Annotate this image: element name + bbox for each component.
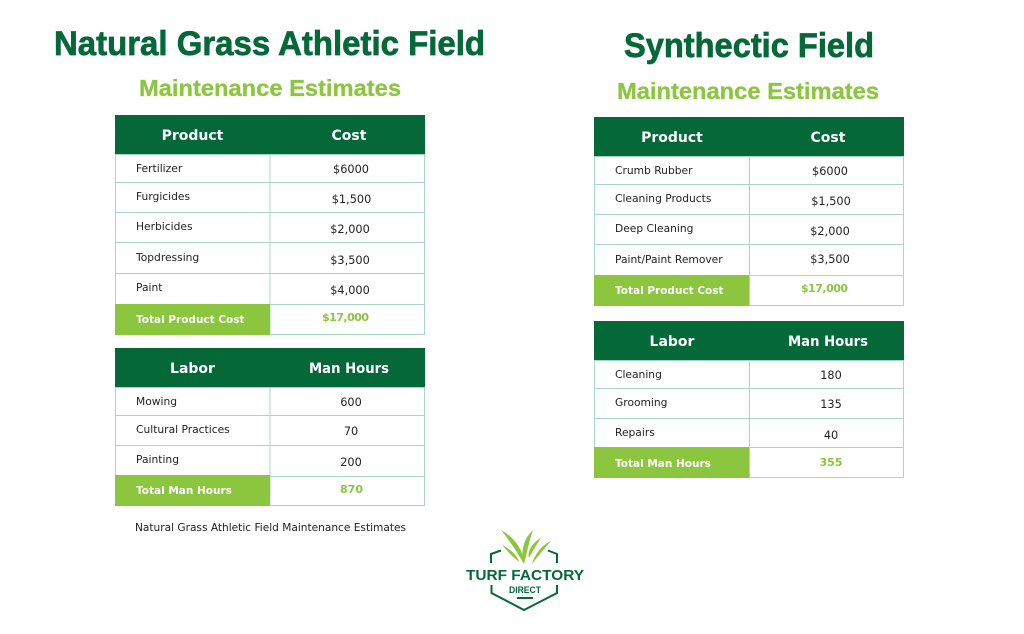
panel: natural grass product cost table: $17,000 bbox=[322, 311, 369, 324]
panel: synthetic product cost table: Cleaning Products bbox=[615, 192, 712, 205]
panel: natural grass labor table: Man Hours bbox=[309, 361, 389, 377]
subtitle: natural grass maintenance estimates: Maintenance Estimates bbox=[139, 75, 401, 101]
panel: natural grass product cost table bbox=[115, 115, 425, 335]
panel: synthetic labor table: Total Man Hours bbox=[615, 458, 711, 470]
logo: Turf Factory Direct bbox=[466, 530, 584, 610]
panel: synthetic product cost table: $6000 bbox=[812, 165, 848, 178]
panel: natural grass labor table: 70 bbox=[344, 425, 358, 438]
panel: synthetic product cost table: Cost bbox=[811, 130, 846, 146]
panel: natural grass product cost table: Herbicides bbox=[136, 220, 193, 233]
panel: natural grass product cost table: $1,500 bbox=[332, 193, 371, 206]
panel: synthetic product cost table: Total Product Cost bbox=[615, 285, 724, 297]
panel: synthetic labor table: Repairs bbox=[615, 426, 655, 439]
panel: natural grass labor table bbox=[115, 348, 425, 506]
panel: natural grass labor table: 870 bbox=[340, 483, 363, 496]
panel: natural grass labor table: 600 bbox=[340, 396, 362, 409]
panel: natural grass product cost table: $2,000 bbox=[330, 223, 370, 236]
panel: natural grass product cost table: Total Product Cost bbox=[136, 314, 245, 326]
panel: synthetic labor table: 135 bbox=[820, 398, 842, 411]
panel: synthetic product cost table: $1,500 bbox=[811, 195, 851, 208]
panel: natural grass product cost table: Furgicides bbox=[136, 190, 190, 203]
panel: synthetic labor table: Grooming bbox=[615, 396, 667, 409]
panel: natural grass labor table: Painting bbox=[136, 453, 179, 466]
panel: synthetic labor table: Cleaning bbox=[615, 368, 662, 381]
logo wordmark: TURF FACTORY bbox=[466, 567, 584, 584]
panel: natural grass labor table: Mowing bbox=[136, 395, 177, 408]
subtitle: synthetic maintenance estimates: Maintenance Estimates bbox=[617, 78, 879, 104]
panel: synthetic product cost table: $3,500 bbox=[810, 253, 850, 266]
panel: natural grass product cost table: $3,500 bbox=[330, 254, 370, 267]
panel: natural grass labor table: Labor bbox=[170, 361, 215, 377]
panel: natural grass product cost table: Fertilizer bbox=[136, 162, 183, 175]
icon: hexagon outline bbox=[491, 550, 557, 610]
panel: synthetic product cost table: Product bbox=[641, 130, 703, 146]
panel: natural grass product cost table: $4,000 bbox=[330, 284, 370, 297]
panel: natural grass labor table: Cultural Practices bbox=[136, 423, 230, 436]
title: natural grass: Natural Grass Athletic Field bbox=[54, 25, 485, 63]
logo sub-word: DIRECT bbox=[509, 585, 541, 596]
panel: synthetic product cost table: $17,000 bbox=[801, 282, 848, 295]
panel: natural grass labor table: Total Man Hours bbox=[136, 485, 232, 497]
panel: natural grass product cost table: Cost bbox=[332, 128, 367, 144]
title: synthetic field: Synthectic Field bbox=[624, 27, 874, 65]
panel: natural grass product cost table: Paint bbox=[136, 281, 162, 294]
panel: natural grass product cost table: Product bbox=[162, 128, 224, 144]
panel: synthetic product cost table: Paint/Paint Remover bbox=[615, 253, 723, 266]
panel: synthetic product cost table: Deep Cleaning bbox=[615, 222, 693, 235]
panel: natural grass product cost table: $6000 bbox=[333, 163, 369, 176]
panel: synthetic product cost table: Crumb Rubber bbox=[615, 164, 693, 177]
caption: Natural Grass Athletic Field Maintenance Estimates bbox=[135, 521, 406, 534]
panel: natural grass labor table: 200 bbox=[340, 456, 362, 469]
panel: natural grass product cost table: Topdressing bbox=[135, 251, 199, 264]
panel: synthetic labor table: 355 bbox=[820, 456, 842, 469]
panel: synthetic product cost table: $2,000 bbox=[810, 225, 850, 238]
panel: synthetic labor table: 180 bbox=[820, 369, 842, 382]
icon: grass blades bbox=[501, 530, 551, 564]
panel: synthetic labor table: Labor bbox=[650, 334, 695, 350]
panel: synthetic labor table: Man Hours bbox=[788, 334, 868, 350]
panel: synthetic labor table bbox=[594, 321, 904, 478]
panel: synthetic labor table: 40 bbox=[824, 429, 838, 442]
panel: synthetic product cost table bbox=[594, 117, 904, 306]
